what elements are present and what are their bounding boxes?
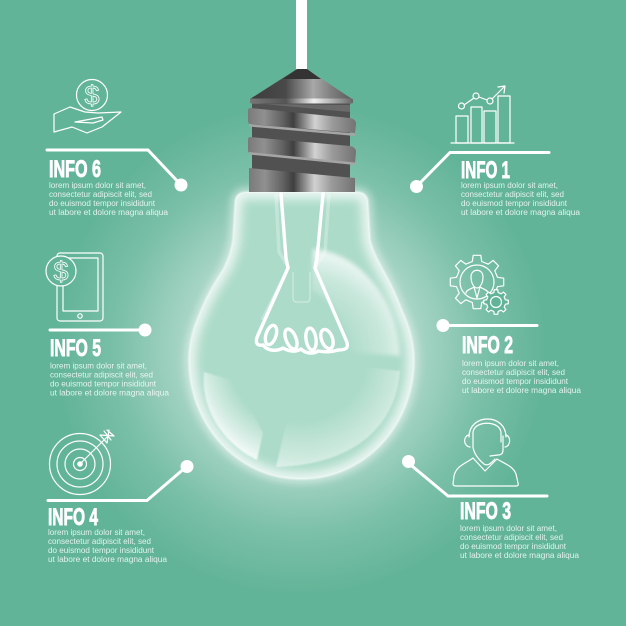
heading: INFO 5 — [50, 335, 101, 362]
icon: gears with person — [450, 255, 508, 314]
icon: tablet with coin: $ — [53, 256, 69, 286]
body text: consectetur adipiscit elit, sed — [460, 533, 563, 542]
connector dot — [410, 180, 423, 193]
bulb glow — [56, 105, 546, 595]
heading: INFO 3 — [460, 498, 511, 525]
icon: hand holding coin: $ — [84, 80, 100, 110]
body text: do euismod tempor insididunt — [462, 377, 569, 386]
INFO 4 block — [48, 430, 194, 564]
body text: lorem ipsum dolor sit amet, — [462, 359, 559, 368]
body text: ut labore et dolore magna aliqua — [49, 208, 169, 217]
icon: support agent with headset — [453, 419, 518, 486]
connector line — [412, 466, 547, 496]
light bulb — [189, 69, 414, 479]
body text: consectetur adipiscit elit, sed — [48, 537, 151, 546]
hanging cord — [296, 0, 307, 70]
body text: ut labore et dolore magna aliqua — [48, 555, 168, 564]
body text: do euismod tempor insididunt — [460, 542, 567, 551]
connector dot — [436, 319, 450, 332]
body text — [48, 528, 168, 564]
connector line — [47, 150, 181, 185]
body text: consectetur adipiscit elit, sed — [461, 190, 564, 199]
body text: consectetur adipiscit elit, sed — [462, 368, 565, 377]
connector dot — [402, 455, 415, 468]
body text: consectetur adipiscit elit, sed — [49, 190, 152, 199]
filament stem — [293, 272, 310, 302]
body text: ut labore et dolore magna aliqua — [461, 208, 581, 217]
INFO 2 block — [436, 255, 582, 395]
heading: INFO 4 — [48, 504, 98, 531]
icon: tablet with coin — [46, 253, 103, 321]
INFO 3 block — [402, 419, 580, 560]
body text: do euismod tempor insididunt — [49, 199, 156, 208]
icon: hand holding coin — [54, 80, 121, 133]
INFO 5 block — [46, 253, 170, 398]
body text: do euismod tempor insididunt — [50, 380, 157, 388]
body text: lorem ipsum dolor sit amet, — [50, 362, 147, 370]
heading: INFO 6 — [49, 156, 101, 183]
heading: INFO 2 — [462, 332, 513, 359]
body text — [462, 359, 582, 395]
body text — [461, 181, 581, 217]
connector dot — [180, 460, 194, 473]
INFO 6 block — [47, 80, 188, 217]
icon: target with arrow — [50, 430, 114, 494]
body text: ut labore et dolore magna aliqua — [460, 551, 580, 560]
body text: ut labore et dolore magna aliqua — [50, 388, 170, 398]
connector line — [417, 152, 549, 186]
connector line — [48, 467, 186, 500]
body text: lorem ipsum dolor sit amet, — [461, 181, 558, 190]
heading: INFO 1 — [461, 157, 510, 184]
body text — [50, 362, 170, 398]
filament wires and coil — [256, 194, 347, 353]
infographic canvas — [45, 0, 581, 574]
body text: lorem ipsum dolor sit amet, — [460, 524, 557, 533]
body text: lorem ipsum dolor sit amet, — [49, 181, 146, 190]
body text — [49, 181, 169, 217]
body text: do euismod tempor insididunt — [461, 199, 568, 208]
body text: consectetur adipiscit elit, sed — [50, 370, 153, 380]
connector line — [443, 324, 537, 327]
connector dot — [174, 178, 188, 192]
metal screw base — [248, 69, 356, 192]
body text — [460, 524, 580, 560]
body text: ut labore et dolore magna aliqua — [462, 386, 582, 395]
connector line — [50, 328, 144, 332]
icon: rising bar chart — [451, 86, 514, 143]
body text: lorem ipsum dolor sit amet, — [48, 528, 145, 537]
filament ghost wires — [262, 194, 329, 320]
glass bulb — [189, 192, 414, 479]
connector dot — [138, 324, 152, 336]
body text: do euismod tempor insididunt — [48, 546, 155, 555]
INFO 1 block — [410, 86, 581, 217]
